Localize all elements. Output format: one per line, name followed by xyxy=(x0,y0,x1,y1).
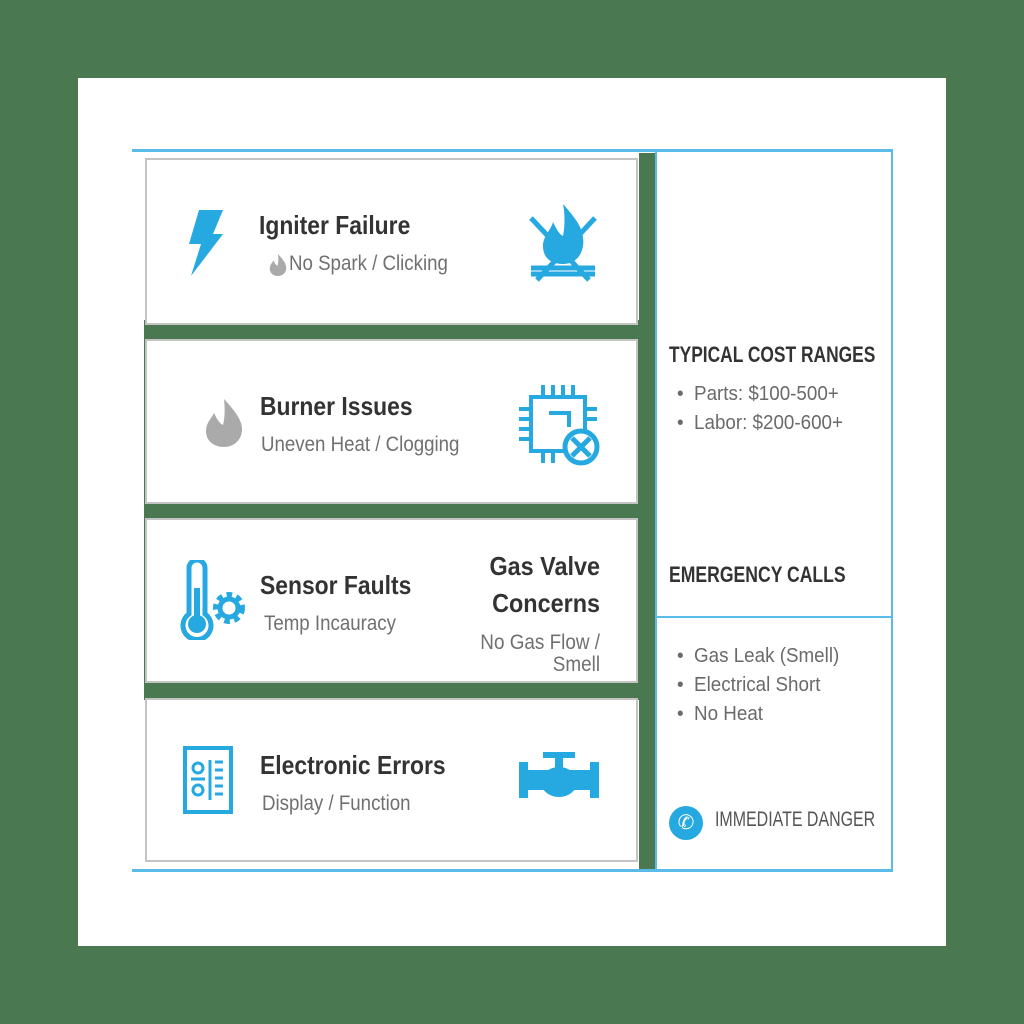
small grey flame xyxy=(270,254,286,276)
cost list: • Parts: $100-500+ xyxy=(677,383,839,405)
green connector strip xyxy=(639,153,655,870)
subtitle: Display / Function xyxy=(262,792,411,815)
card: burner issues xyxy=(145,339,638,504)
subtitle: Uneven Heat / Clogging xyxy=(261,433,459,456)
gas valve text xyxy=(480,551,600,676)
emergency list: • Electrical Short xyxy=(677,674,820,696)
title: Burner Issues xyxy=(260,391,413,421)
icon: phone xyxy=(669,806,703,840)
card: sensor faults xyxy=(145,518,638,683)
gas valve text: Concerns xyxy=(492,588,600,618)
icon: valve xyxy=(519,752,599,798)
gas valve text: No Gas Flow / xyxy=(480,631,600,654)
panel: right info xyxy=(655,150,893,871)
cost list xyxy=(677,383,843,434)
top blue line xyxy=(132,149,893,152)
gas valve text: Gas Valve xyxy=(489,551,600,581)
subtitle: No Spark / Clicking xyxy=(289,252,448,275)
cost list: • Labor: $200-600+ xyxy=(677,412,843,434)
icon: thermometer gear xyxy=(180,560,245,640)
bottom blue line xyxy=(132,869,893,872)
emergency list: • No Heat xyxy=(677,703,763,725)
title: Igniter Failure xyxy=(259,210,410,240)
title: Sensor Faults xyxy=(260,570,411,600)
emergency list xyxy=(677,645,839,725)
heading: emergency calls: EMERGENCY CALLS xyxy=(669,562,846,587)
icon: grey flame xyxy=(206,399,242,447)
card: electronic errors xyxy=(145,698,638,862)
gas valve text: Smell xyxy=(553,653,600,676)
icon: chip error xyxy=(519,385,600,466)
subtitle: Temp Incauracy xyxy=(264,612,396,635)
divider xyxy=(657,616,891,618)
title: Electronic Errors xyxy=(260,750,446,780)
emergency list: • Gas Leak (Smell) xyxy=(677,645,839,667)
icon: bolt xyxy=(189,210,223,276)
heading: typical cost ranges: TYPICAL COST RANGES xyxy=(669,342,875,367)
immediate danger text: IMMEDIATE DANGER xyxy=(715,808,875,831)
green band behind cards xyxy=(144,320,644,700)
white panel xyxy=(78,78,946,946)
icon: control panel xyxy=(183,746,233,814)
icon: crossed flame xyxy=(529,204,597,282)
card: igniter failure xyxy=(145,158,638,325)
icon: phone: ✆ xyxy=(678,812,694,834)
